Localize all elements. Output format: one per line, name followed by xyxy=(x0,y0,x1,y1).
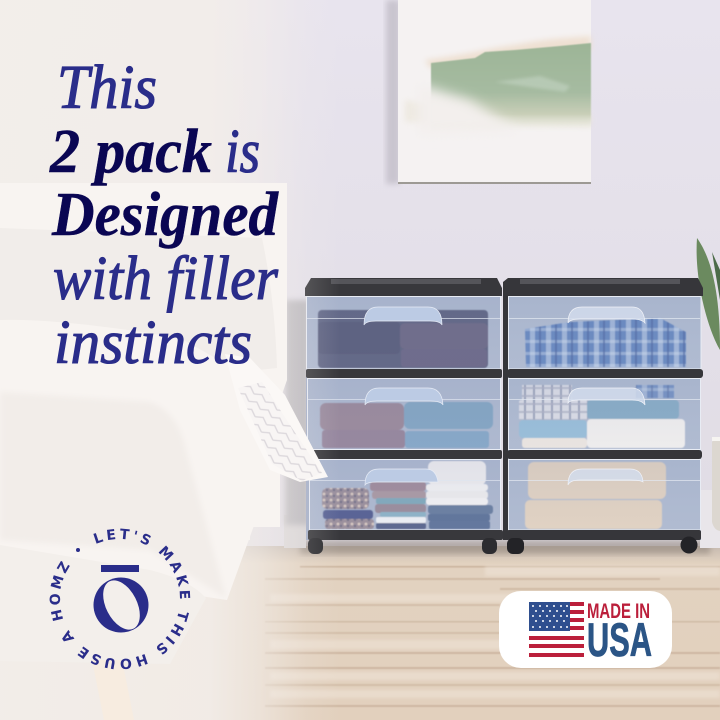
headline line: with filler: with filler xyxy=(53,245,279,313)
plant leaf xyxy=(697,238,720,350)
bed leg xyxy=(92,660,134,720)
right unit lid and shelves xyxy=(503,278,703,540)
left unit lid and shelves xyxy=(305,278,503,540)
sheet flap xyxy=(225,354,328,482)
american flag xyxy=(529,602,584,657)
right unit wheels xyxy=(507,536,698,554)
right drawer handles xyxy=(568,307,645,485)
headline line: 2 pack is: 2 pack xyxy=(49,118,212,186)
left unit interior xyxy=(306,296,501,540)
bed base xyxy=(0,545,206,664)
headline xyxy=(49,54,279,377)
right unit interior xyxy=(508,296,701,540)
wall background xyxy=(0,0,720,560)
right drawer unit xyxy=(503,278,703,554)
made in label: MADE IN xyxy=(587,600,650,623)
headline line: instincts: instincts xyxy=(54,309,252,377)
right drawer rim lines xyxy=(509,318,700,481)
headboard xyxy=(0,183,287,540)
chevron throw xyxy=(238,382,322,481)
logo ring text: LET'S MAKE THIS HOUSE A HOMZ xyxy=(50,528,190,670)
left unit wheels xyxy=(308,538,497,554)
duvet xyxy=(0,352,273,660)
logo ring dot xyxy=(76,548,80,552)
wood floor xyxy=(0,540,720,720)
right unit clothes xyxy=(519,318,686,529)
circular brand logo xyxy=(50,528,190,670)
left drawer unit xyxy=(305,278,503,554)
duvet shadow fold xyxy=(0,392,226,598)
pillow front xyxy=(0,320,240,372)
right drawer fronts xyxy=(508,296,701,530)
bed xyxy=(0,183,328,720)
left drawer fronts xyxy=(306,296,500,530)
left drawer rim lines xyxy=(307,318,500,481)
pillow xyxy=(0,228,277,372)
left lid recess xyxy=(331,279,481,284)
wall shadow behind the bed xyxy=(285,300,309,525)
fading overlay over the left of the photo xyxy=(0,0,340,720)
headline line: 2 pack is: is xyxy=(225,118,260,186)
shadow under the units xyxy=(300,540,710,554)
headline line: This: This xyxy=(57,54,157,122)
left unit clothes xyxy=(318,310,493,529)
badge background xyxy=(499,591,672,668)
right lid recess xyxy=(520,279,680,284)
plant pot xyxy=(712,437,720,531)
USA label: USA xyxy=(587,613,652,666)
baseboard xyxy=(284,490,720,548)
wall art painting xyxy=(386,0,591,184)
logo letter o xyxy=(94,578,148,632)
headline line: Designed: Designed xyxy=(51,181,279,249)
left drawer handles xyxy=(364,307,443,485)
logo macron bar xyxy=(101,565,139,572)
made in USA badge xyxy=(499,591,672,668)
